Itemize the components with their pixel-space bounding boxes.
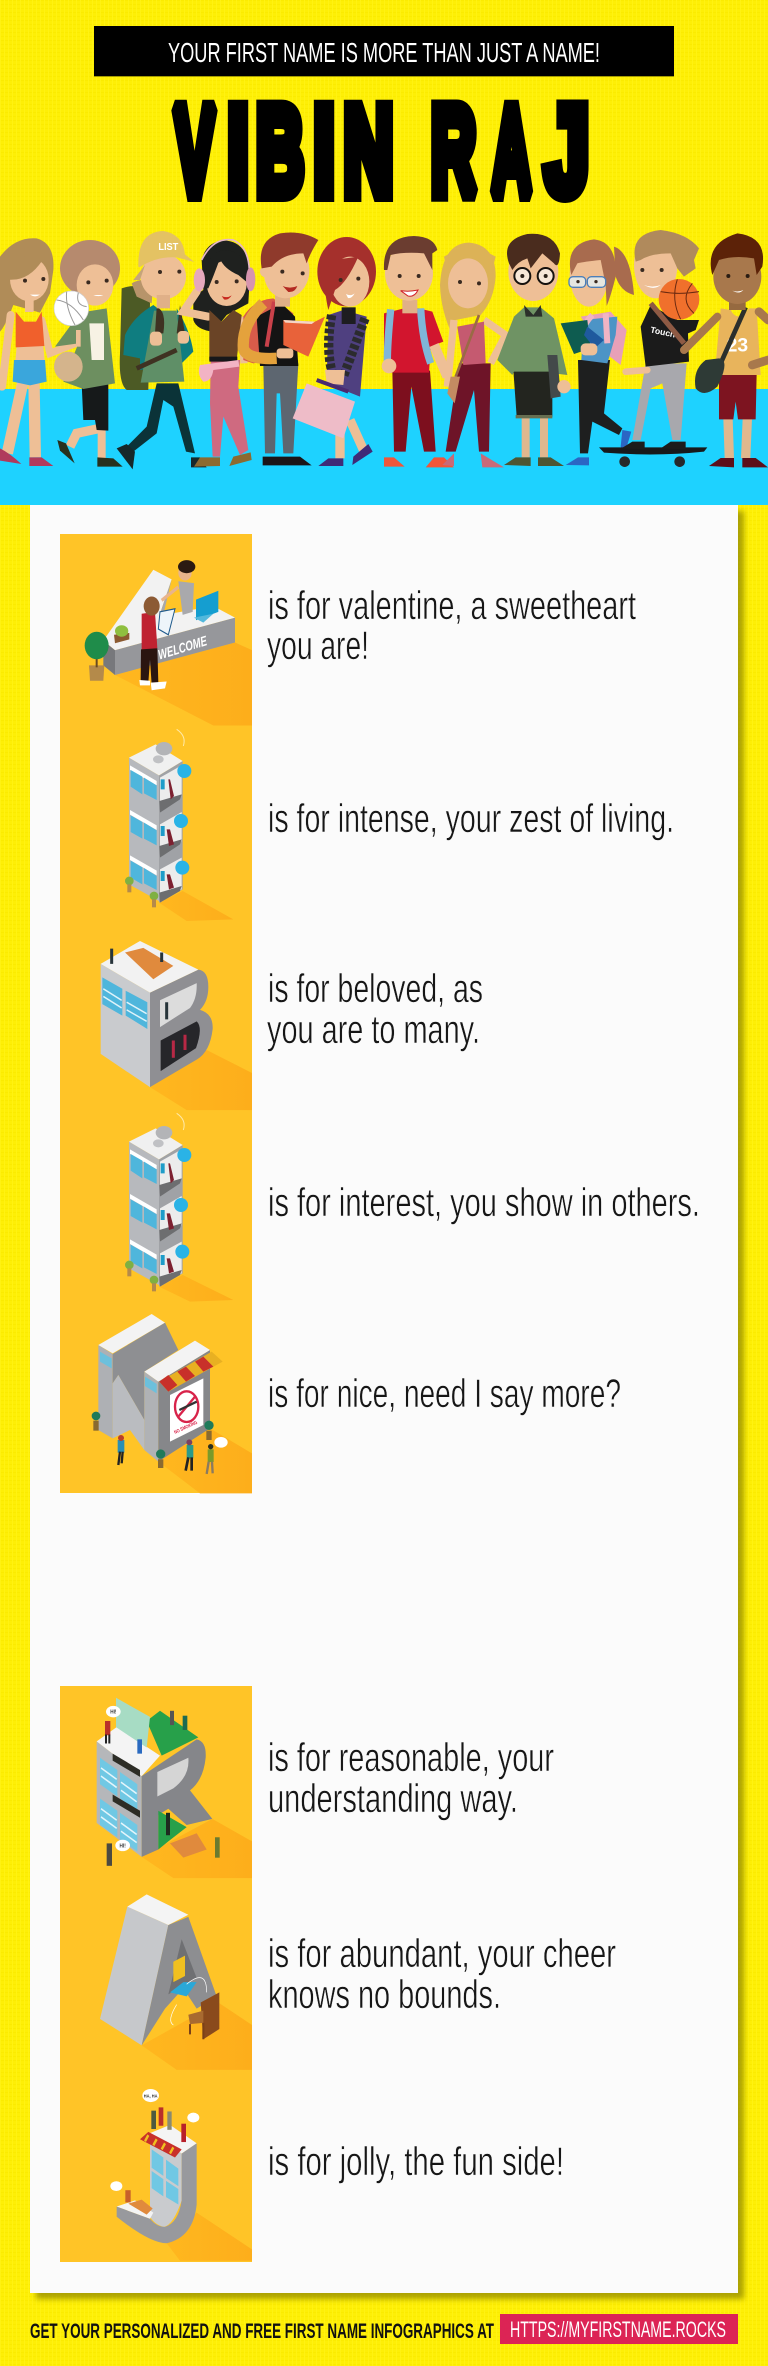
student 3: hiker with cap and backpack: LIST (158, 242, 178, 253)
speech bubbles (110, 2089, 199, 2191)
orange column: bottom three tiles (60, 1686, 252, 2262)
title: name: J (545, 82, 589, 222)
pedestrians (118, 1435, 214, 1474)
text: A line (268, 1932, 616, 2017)
satellite dish (153, 1113, 184, 1147)
text: J line: is for jolly, the fun side! (268, 2140, 564, 2184)
text: V line (267, 584, 636, 668)
potted tree (85, 632, 109, 681)
student 2: girl with volleyball (54, 240, 123, 467)
text: R line (268, 1736, 554, 1821)
title: name (174, 81, 589, 222)
student 11: skateboarder with basketball (599, 230, 707, 467)
rooftop people (125, 2107, 186, 2202)
student 3: hiker with cap and backpack (117, 231, 207, 469)
title: name: A (492, 83, 531, 221)
receptionist (162, 560, 195, 615)
tower body (129, 1128, 233, 1302)
student 12: boy in jersey with shoulder bag: 23 (727, 336, 748, 357)
title: name: I (228, 81, 248, 221)
orange column: top five tiles (60, 534, 252, 1493)
title: name: I (314, 81, 334, 221)
title: name: N (344, 82, 393, 221)
white content panel (30, 505, 744, 2299)
wooden chair (188, 1992, 219, 2039)
speech bubbles: HA, HA (144, 2093, 158, 2099)
no smoking sign: NO SMOKING (173, 1420, 199, 1436)
student 9: boy with glasses (497, 234, 571, 466)
striped awning (159, 1352, 223, 1392)
icon: letter I office tower (125, 729, 233, 921)
speech bubble (214, 1437, 228, 1448)
text: A line: knows no bounds. (268, 1973, 501, 2017)
desk plant (114, 625, 129, 643)
icon: letter A laptop and chair (100, 1894, 252, 2070)
illustration: row of students (0, 230, 768, 469)
customer (139, 597, 175, 690)
footer call to action: GET YOUR PERSONALIZED AND FREE FIRST NAME INFOGRAPHICS AT (30, 2320, 494, 2343)
student 7: boy in red shirt (382, 236, 454, 467)
icon: letter V welcome desk (85, 560, 252, 726)
student 5: boy with book (243, 232, 325, 465)
icon: letter V welcome desk: WELCOME (156, 632, 209, 663)
text: B line (267, 967, 483, 1052)
text: V line: is for valentine, a sweetheart (268, 584, 636, 628)
icon: letter N shopfront (92, 1314, 252, 1493)
icon: letter J building (110, 2089, 252, 2261)
status bubbles (174, 1148, 191, 1259)
title: name: B (256, 82, 304, 221)
text: B line: you are to many. (267, 1008, 480, 1052)
speech bubbles HI (106, 1706, 130, 1851)
speech bubbles HI: HI! (120, 1843, 126, 1850)
satellite dish (153, 729, 184, 763)
striped awning (140, 2132, 182, 2158)
students right half (382, 230, 768, 467)
students left half (0, 231, 376, 469)
icon: letter B office block (101, 941, 252, 1110)
student 1: girl in orange top (0, 238, 80, 466)
text: B line: is for beloved, as (268, 967, 483, 1011)
monitor (194, 591, 218, 623)
no smoking sign (170, 1378, 203, 1442)
status bubbles (174, 764, 191, 875)
tower body (129, 744, 233, 921)
text: A line: is for abundant, your cheer (268, 1932, 616, 1976)
tower plants (125, 877, 158, 907)
speech bubbles HI: HI! (110, 1709, 117, 1716)
text: N line: is for nice, need I say more? (268, 1372, 621, 1416)
text: V line: you are! (267, 624, 369, 668)
blue floor band (0, 389, 768, 505)
tagline banner (94, 26, 674, 77)
tower plants (125, 1261, 158, 1291)
student 12: boy in jersey with shoulder bag (684, 233, 768, 467)
potted plants (92, 1412, 214, 1468)
title: name: R (431, 81, 476, 221)
student 10: girl on the move with book (561, 239, 634, 465)
text: R line: is for reasonable, your (268, 1736, 554, 1780)
student 4: girl with headphones (183, 240, 255, 467)
rooftop people (105, 1711, 220, 1866)
title: name: V (174, 81, 215, 221)
icon: letter R building (97, 1698, 252, 1878)
icon: letter I office tower repeat (125, 1113, 233, 1302)
student 11: skateboarder with basketball: Touch (650, 325, 676, 340)
text: R line: understanding way. (268, 1777, 518, 1821)
student 8: blonde girl (440, 243, 506, 467)
student 6: girl with pink bag (293, 237, 376, 466)
